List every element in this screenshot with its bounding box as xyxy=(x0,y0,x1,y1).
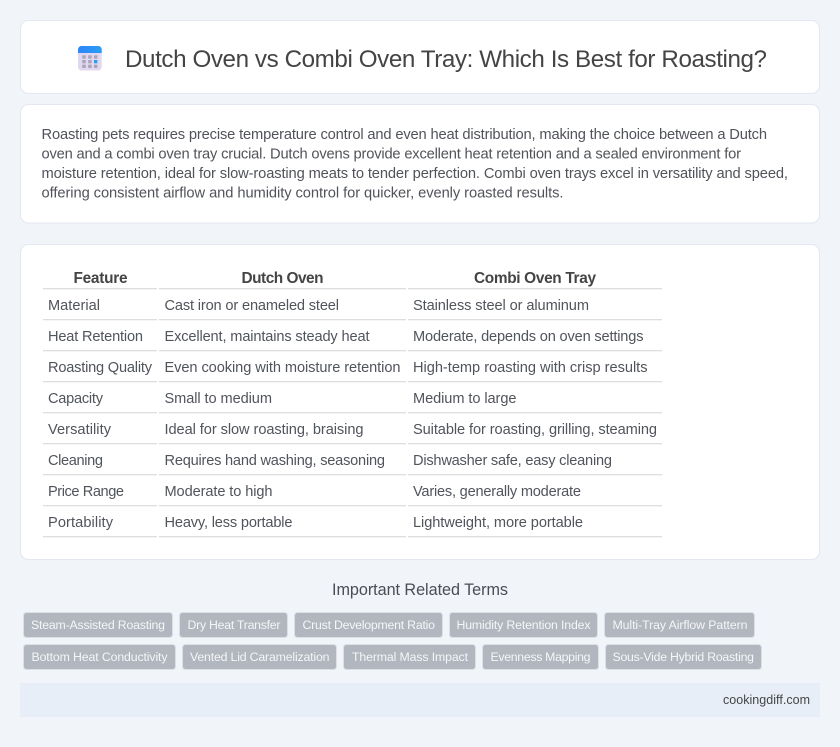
tag xyxy=(344,644,476,670)
row: material xyxy=(48,298,589,314)
row: versatility xyxy=(48,422,657,438)
tag xyxy=(180,612,288,638)
row: capacity: Medium to large xyxy=(413,391,516,407)
footer source text: cookingdiff.com xyxy=(723,693,810,707)
row: price range: Varies, generally moderate xyxy=(413,484,581,500)
row: heat retention: Moderate, depends on oven settings xyxy=(413,329,644,345)
panel: description xyxy=(20,104,820,223)
row: roasting quality: Roasting Quality xyxy=(48,360,153,376)
text block: description: moisture retention, ideal for slow-roasting meats to tender perfection. Combi oven trays excel in versatility and speed, xyxy=(42,166,788,182)
row: roasting quality xyxy=(48,360,648,376)
tag: Evenness Mapping xyxy=(490,650,591,664)
row: capacity xyxy=(48,391,516,407)
tag xyxy=(604,612,754,638)
row: roasting quality: High-temp roasting with crisp results xyxy=(413,360,648,376)
row: roasting quality: Even cooking with moisture retention xyxy=(164,360,400,376)
row: portability: Heavy, less portable xyxy=(164,515,292,531)
row: portability: Portability xyxy=(48,515,114,531)
tag: Humidity Retention Index xyxy=(456,618,591,632)
tag: Steam-Assisted Roasting xyxy=(31,618,165,632)
table header row: Dutch Oven xyxy=(242,270,324,287)
row: capacity: Small to medium xyxy=(164,391,272,407)
row: versatility: Suitable for roasting, grilling, steaming xyxy=(413,422,657,438)
tag xyxy=(450,612,598,638)
row: cleaning: Dishwasher safe, easy cleaning xyxy=(413,453,612,469)
row: price range: Moderate to high xyxy=(164,484,272,500)
row: versatility: Versatility xyxy=(48,422,112,438)
tag: Vented Lid Caramelization xyxy=(190,650,330,664)
icon: calendar xyxy=(78,46,102,70)
tag xyxy=(606,644,762,670)
table header row: Feature xyxy=(74,270,128,287)
tag: Bottom Heat Conductivity xyxy=(32,650,168,664)
tag: Crust Development Ratio xyxy=(302,618,435,632)
text block: description: offering consistent airflow and humidity control for quicker, evenly roasted results. xyxy=(42,186,564,202)
row: versatility: Ideal for slow roasting, braising xyxy=(164,422,364,438)
tag xyxy=(182,644,336,670)
row: portability: Lightweight, more portable xyxy=(413,515,583,531)
tag xyxy=(24,644,176,670)
text block: description: oven and a combi oven tray crucial. Dutch ovens provide excellent heat retention and a sealed environment for xyxy=(42,146,741,162)
row: cleaning xyxy=(48,453,612,469)
table header row xyxy=(74,270,596,287)
row: cleaning: Cleaning xyxy=(48,453,103,469)
tag xyxy=(294,612,442,638)
panel: comparison table xyxy=(20,244,820,560)
text block: description: Roasting pets requires precise temperature control and even heat distribution, making the choice between a Dutch xyxy=(42,127,767,143)
row: heat retention: Heat Retention xyxy=(48,329,143,345)
text block: description xyxy=(42,127,788,202)
footer bar xyxy=(20,683,820,717)
row: material: Material xyxy=(48,298,100,314)
row: heat retention: Excellent, maintains steady heat xyxy=(164,329,370,345)
row: capacity: Capacity xyxy=(48,391,104,407)
row: material: Cast iron or enameled steel xyxy=(164,298,339,314)
title: Dutch Oven vs Combi Oven Tray: Which Is Best for Roasting? xyxy=(125,46,767,73)
tag: Multi-Tray Airflow Pattern xyxy=(612,618,748,632)
panel: header xyxy=(20,20,820,94)
row: portability xyxy=(48,515,583,531)
tag xyxy=(482,644,598,670)
table rules xyxy=(43,288,662,537)
heading: related terms: Important Related Terms xyxy=(332,581,508,599)
row: material: Stainless steel or aluminum xyxy=(413,298,589,314)
row: price range: Price Range xyxy=(48,484,124,500)
related term tags xyxy=(24,612,762,670)
table header row: Combi Oven Tray xyxy=(474,270,596,287)
tag: Sous-Vide Hybrid Roasting xyxy=(612,650,754,664)
row: heat retention xyxy=(48,329,644,345)
row: price range xyxy=(48,484,581,500)
tag: Dry Heat Transfer xyxy=(188,618,280,632)
row: cleaning: Requires hand washing, seasoning xyxy=(164,453,385,469)
tag xyxy=(24,612,172,638)
tag: Thermal Mass Impact xyxy=(352,650,469,664)
